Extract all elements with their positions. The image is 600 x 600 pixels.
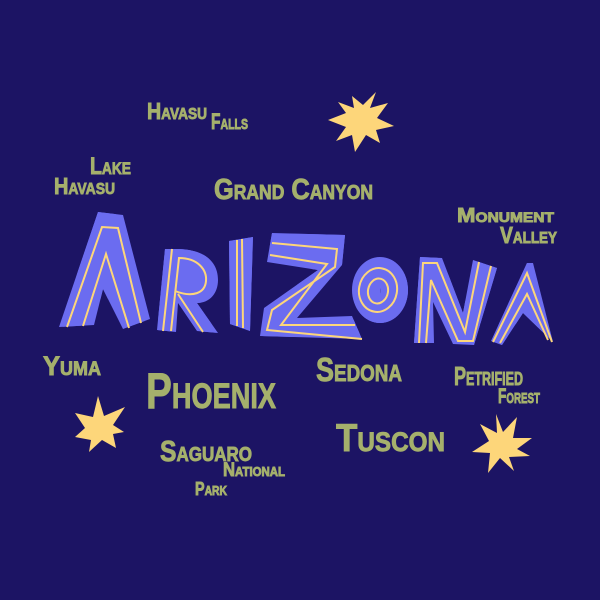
label: Monument Valley: Monument: [457, 205, 554, 227]
star: bottom left: [75, 396, 125, 452]
letter R: [157, 248, 218, 333]
letter N: [414, 257, 497, 345]
label: Monument Valley: [457, 205, 557, 248]
label: Lake Havasu: Lake: [90, 153, 131, 180]
label: Saguaro National Park: [160, 436, 285, 499]
label: Monument Valley: Valley: [500, 222, 557, 248]
label: Havasu Falls: Falls: [211, 109, 248, 134]
star: top: [328, 92, 394, 152]
label: Sedona: Sedona: [316, 351, 402, 388]
label: Petrified Forest: Petrified: [454, 361, 523, 391]
label: Saguaro National Park: National: [223, 460, 285, 481]
label: Havasu Falls: [147, 98, 248, 134]
letter R: R: [152, 223, 218, 359]
label: Tuscon: Tuscon: [336, 417, 445, 460]
letter A: A: [59, 176, 150, 365]
label: Yuma: Yuma: [43, 351, 101, 381]
label: Havasu Falls: Havasu: [147, 98, 207, 124]
letter Z: [260, 233, 362, 340]
letter O: O: [350, 240, 411, 343]
letter A (final): A: [491, 237, 553, 370]
letter O: [352, 257, 408, 323]
label: Saguaro National Park: Park: [195, 479, 227, 499]
title: Arizona: [59, 212, 553, 345]
letter A (final): [491, 263, 553, 345]
label: Grand Canyon: Grand Canyon: [214, 174, 373, 206]
label: Saguaro National Park: Saguaro: [160, 436, 252, 468]
label: Phoenix: Phoenix: [146, 363, 277, 419]
letter A: [59, 212, 150, 329]
letter Z: Z: [258, 201, 365, 369]
label: Lake Havasu: [54, 153, 131, 199]
label: Petrified Forest: [454, 361, 540, 408]
letter N: N: [404, 229, 507, 372]
label: Petrified Forest: Forest: [498, 385, 540, 408]
letter I: I: [217, 207, 264, 360]
star: bottom right: [472, 414, 532, 473]
label: Lake Havasu: Havasu: [54, 173, 115, 199]
